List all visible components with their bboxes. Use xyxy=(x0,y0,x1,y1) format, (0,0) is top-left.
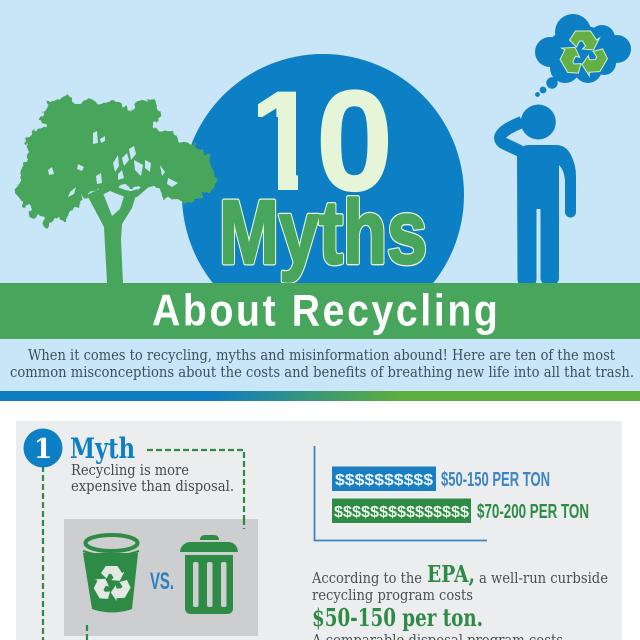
tree canopy gaps xyxy=(48,131,178,197)
dashed connector over box xyxy=(87,519,244,640)
subtitle About Recycling: About Recycling xyxy=(152,285,498,335)
title word Myths: Myths xyxy=(219,183,427,283)
number badge xyxy=(24,428,62,468)
dashed connector top xyxy=(147,450,244,519)
icon: recycling bin xyxy=(83,535,139,612)
title word Myths: Myths xyxy=(219,183,427,283)
bar: recycling cost: $50-150 PER TON xyxy=(441,469,550,491)
myth statement xyxy=(71,463,234,495)
icon: thought cloud with recycling symbol xyxy=(535,14,631,97)
panel background xyxy=(16,421,622,640)
icon: trash can xyxy=(180,535,238,614)
myth statement: Recycling is more xyxy=(71,463,189,479)
icon: tree xyxy=(17,97,216,283)
bar: disposal cost: $$$$$$$$$$$$$$$ xyxy=(334,504,469,521)
chart: cost comparison xyxy=(314,446,589,540)
myth statement: expensive than disposal. xyxy=(71,479,234,495)
bar: recycling cost: $$$$$$$$$$ xyxy=(335,472,433,489)
blue title circle xyxy=(182,54,464,283)
fact text: recycling program costs xyxy=(312,588,473,604)
dashed connector left xyxy=(42,466,44,640)
comparison box xyxy=(64,519,258,636)
fact text: EPA, xyxy=(427,561,475,588)
header background xyxy=(0,0,640,401)
icon: person scratching head xyxy=(500,104,576,288)
number badge: 1 xyxy=(34,434,52,465)
fact text: According to the xyxy=(311,571,422,587)
fact text: $50-150 per ton. xyxy=(312,603,483,632)
fact text xyxy=(311,561,608,640)
title number 10: 0 xyxy=(316,62,393,221)
versus label: VS. xyxy=(150,568,174,595)
panel: myth 1 xyxy=(16,421,622,640)
title number 10 xyxy=(258,89,388,192)
green ground band xyxy=(0,283,640,339)
gradient divider xyxy=(0,391,640,401)
myth heading: Myth xyxy=(70,432,135,465)
fact text: a well-run curbside xyxy=(479,571,608,587)
bar: disposal cost xyxy=(332,498,589,523)
bar: recycling cost xyxy=(332,466,550,491)
title number 10: 1 xyxy=(243,62,323,221)
bar: disposal cost: $70-200 PER TON xyxy=(477,501,589,523)
intro text xyxy=(10,348,634,381)
